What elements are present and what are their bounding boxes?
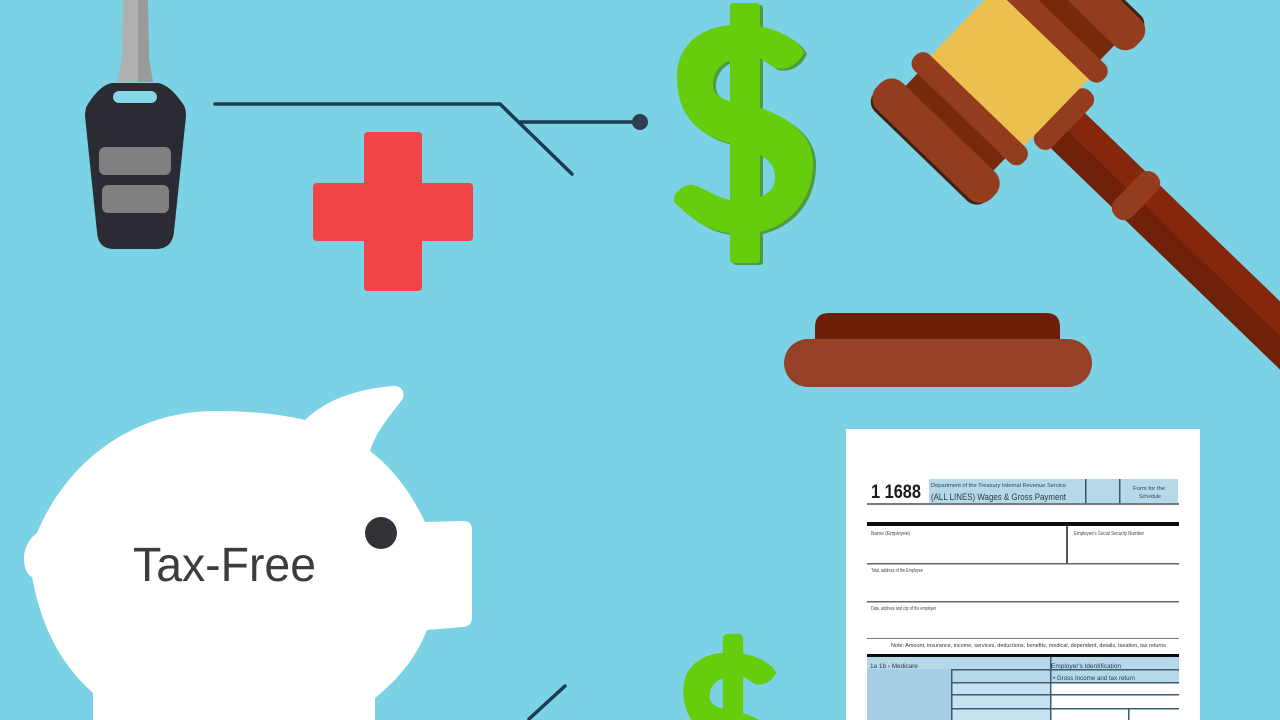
piggy bank eye [365, 517, 397, 549]
icon: car key fob [85, 0, 186, 249]
form name fields: Name (Employee) [871, 531, 910, 537]
tax form document [846, 429, 1200, 720]
form name fields: Note: Amount, insurance, income, services, deductions, benefits, medical, dependent, details, taxation, tax returns [891, 643, 1166, 649]
form table: Employer's Identification [1051, 664, 1121, 670]
form table [867, 654, 1179, 720]
form header: (ALL LINES) Wages & Gross Payment [931, 492, 1066, 502]
form name fields: Date, address and city of the employer [871, 606, 936, 612]
form header: Department of the Treasury Internal Revenue Service [931, 483, 1066, 489]
piggy bank label: Tax-Free [133, 539, 316, 592]
gavel yellow band [929, 0, 1090, 147]
form header [867, 479, 1179, 505]
connector line: top [215, 104, 648, 174]
connector line: bottom [529, 686, 565, 719]
gavel lower end [863, 44, 1033, 212]
form name fields: Total, address of the Employee [871, 568, 923, 574]
icon: gavel head and handle [863, 0, 1280, 441]
icon: red medical cross [313, 132, 473, 291]
icon: white piggy bank [24, 386, 472, 720]
form name fields [867, 522, 1179, 649]
icon: small green dollar sign [683, 634, 776, 720]
form header: 1 1688 [871, 482, 921, 503]
gavel handle [1030, 84, 1280, 378]
icon: gavel sound block [784, 313, 1092, 387]
icon: large green dollar sign [674, 3, 816, 265]
form header: Form for the [1133, 486, 1165, 492]
form table: • Gross Income and tax return [1053, 676, 1135, 682]
gavel upper end [984, 0, 1154, 87]
form header: Schedule [1139, 494, 1161, 500]
form name fields: Employee's Social Security Number [1074, 531, 1144, 537]
form table: 1a 1b › Medicare [870, 664, 919, 670]
